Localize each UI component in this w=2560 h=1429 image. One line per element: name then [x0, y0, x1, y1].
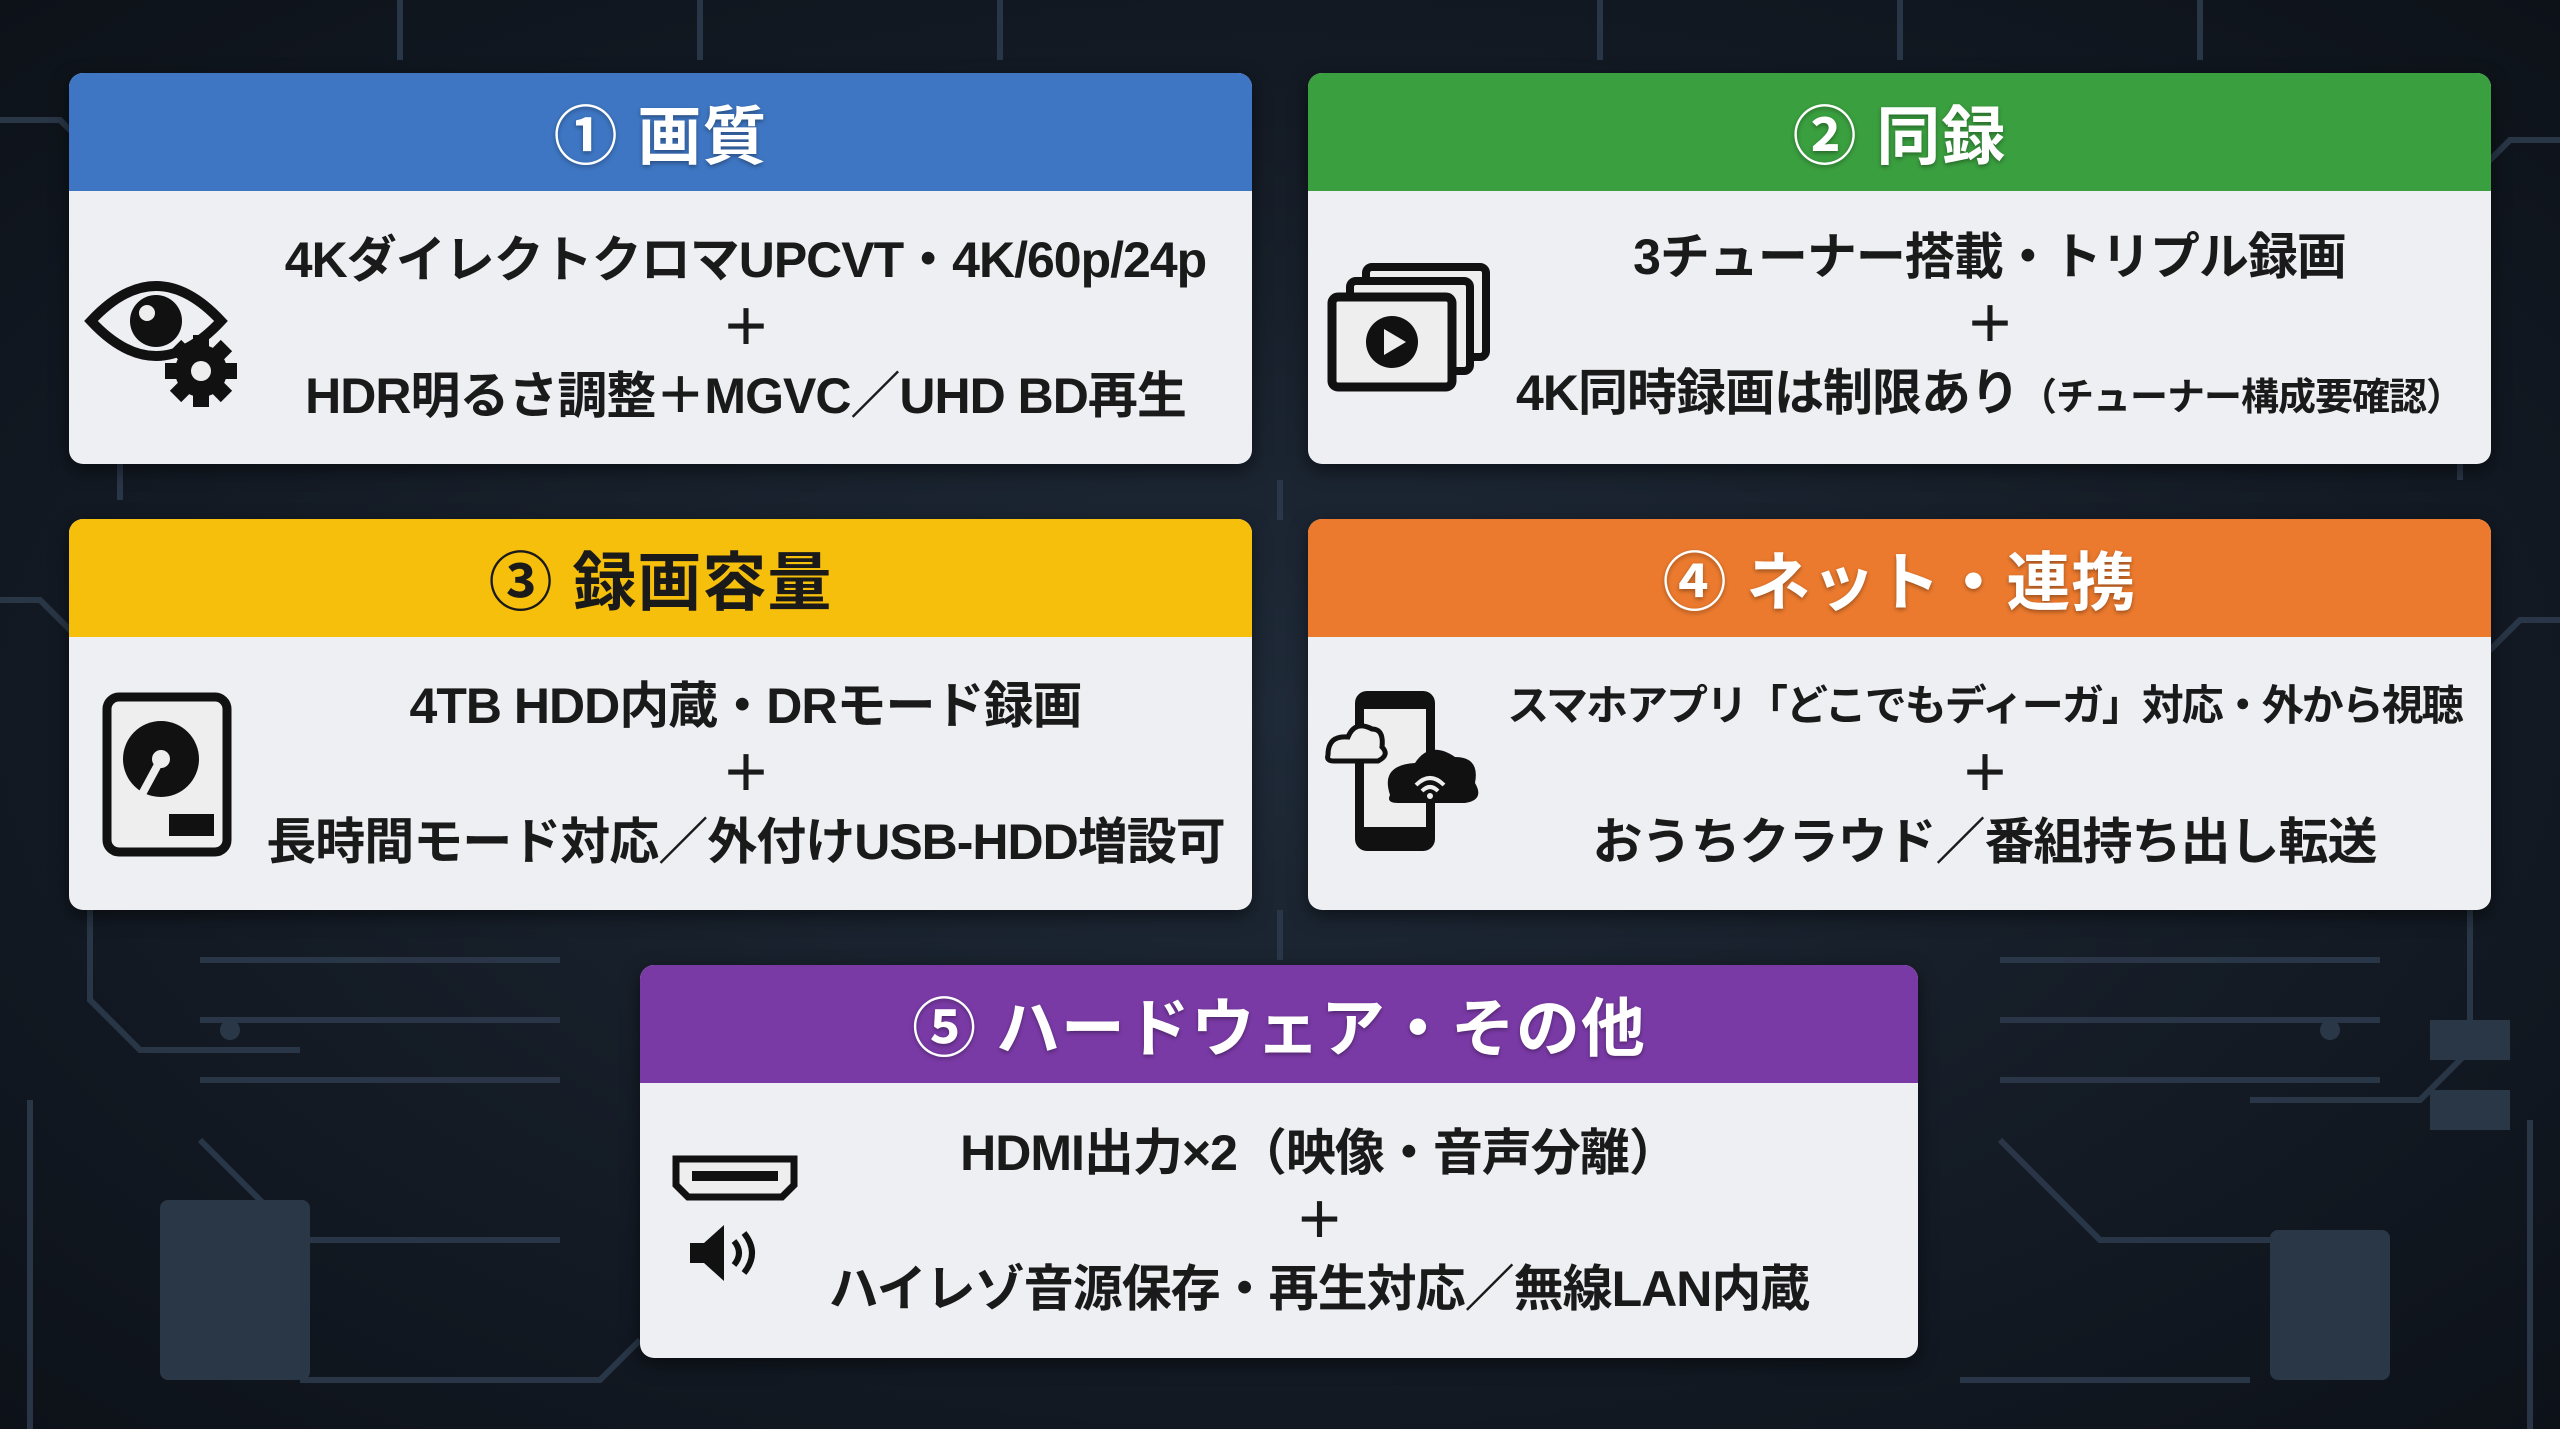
text: hardware features — [829, 1124, 1810, 1316]
panel: 2 simultaneous recording — [1308, 73, 2491, 464]
text: recording features: 3チューナー搭載・トリプル録画 — [1633, 229, 2346, 285]
icon: eye with gear — [84, 281, 237, 407]
text: recording features: ＋ — [1965, 297, 2014, 353]
text: network features: スマホアプリ「どこでもディーガ」対応・外から視聴 — [1507, 682, 2462, 728]
icon: stacked video frames — [1328, 263, 1490, 392]
panel: 4 network — [1308, 519, 2491, 910]
text: capacity features: ＋ — [721, 746, 770, 802]
heading: 2 simultaneous recording: ② 同録 — [1793, 101, 2006, 173]
heading: 1 image quality: ① 画質 — [554, 101, 767, 173]
panel: 5 hardware — [640, 965, 1918, 1358]
text: quality features: ＋ — [721, 300, 770, 356]
heading: 5 hardware — [640, 965, 1918, 1083]
heading: 5 hardware: ⑤ ハードウェア・その他 — [912, 993, 1646, 1065]
text: hardware features: HDMI出力×2（映像・音声分離） — [960, 1124, 1678, 1180]
text: recording features — [1516, 229, 2463, 421]
text: hardware features: ＋ — [1294, 1192, 1344, 1248]
heading: 2 simultaneous recording — [1308, 73, 2491, 191]
panel: 3 recording capacity — [69, 519, 1252, 910]
text: capacity features: 長時間モード対応／外付けUSB-HDD増設可 — [266, 814, 1225, 870]
text: capacity features: 4TB HDD内蔵・DRモード録画 — [410, 678, 1081, 734]
heading: 3 recording capacity — [69, 519, 1252, 637]
panel: 1 image quality — [69, 73, 1252, 464]
text: network features — [1507, 682, 2464, 870]
text: network features: おうちクラウド／番組持ち出し転送 — [1592, 814, 2376, 870]
text: quality features — [285, 232, 1206, 424]
heading: 4 network — [1308, 519, 2491, 637]
text: capacity features — [266, 678, 1225, 870]
icon: hard disk — [102, 692, 232, 856]
text: recording features: 4K同時録画は制限あり（チューナー構成要確認） — [1516, 365, 2463, 421]
icon: smartphone with cloud — [1325, 691, 1478, 851]
text: hardware features: ハイレゾ音源保存・再生対応／無線LAN内蔵 — [829, 1260, 1809, 1316]
icon: hdmi and speaker — [672, 1156, 798, 1281]
heading: 4 network: ④ ネット・連携 — [1663, 547, 2136, 619]
text: network features: ＋ — [1960, 746, 2009, 802]
heading: 3 recording capacity: ③ 録画容量 — [489, 547, 832, 619]
text: quality features: HDR明るさ調整＋MGVC／UHD BD再生 — [305, 368, 1186, 424]
heading: 1 image quality — [69, 73, 1252, 191]
text: quality features: 4KダイレクトクロマUPCVT・4K/60p/24p — [285, 232, 1206, 288]
